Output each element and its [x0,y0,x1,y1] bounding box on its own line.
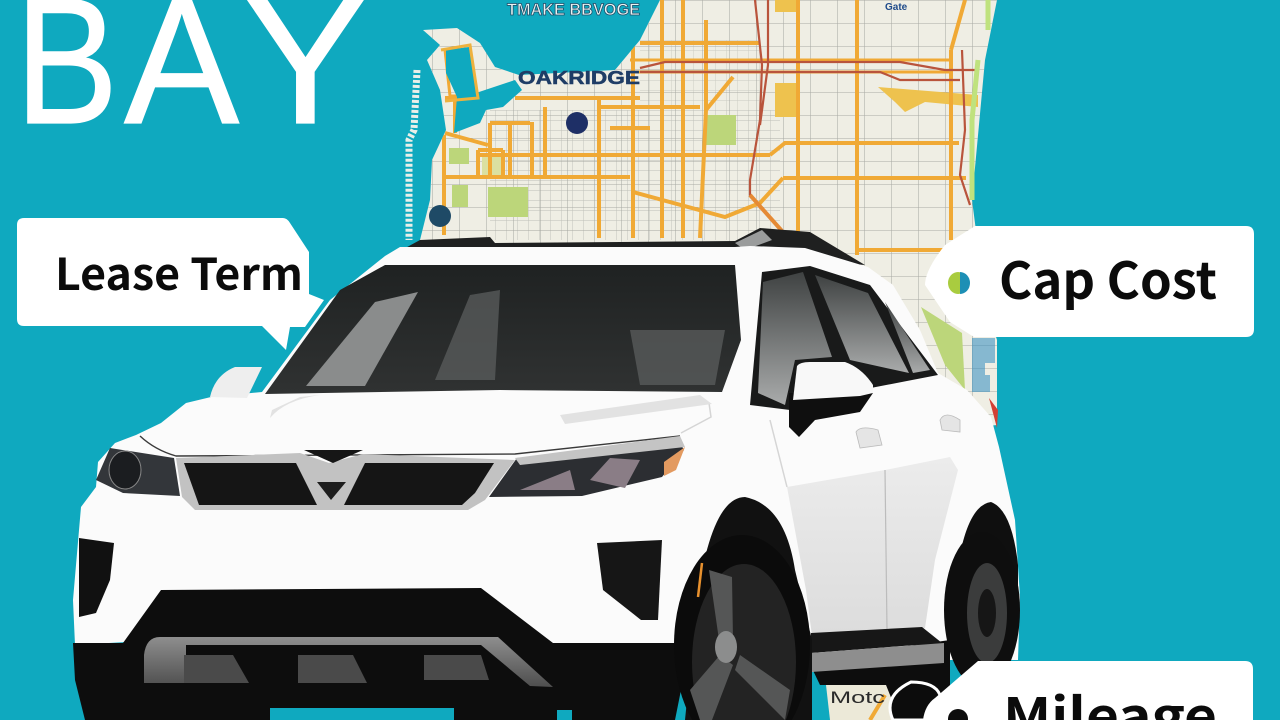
orange road sliver [698,563,702,597]
label text: Lease Term: Lease Term [55,239,303,303]
side skirt [811,643,944,672]
windshield reflection [306,292,418,386]
rear wheel arch [958,502,1018,620]
mirror housing [789,393,873,437]
front arch [685,497,812,720]
under-body shadow [808,640,950,720]
rear quarter window [885,302,930,373]
front door edge [681,403,787,487]
map parks [449,115,965,390]
headlight accent [664,447,685,476]
map top label: TMAKE BBVOGE [507,0,640,19]
left headlight lens [109,451,141,489]
skid plate tabs [184,655,489,683]
hood crease [270,395,712,424]
mirror [793,362,873,400]
map land [420,0,997,430]
map marker [429,205,451,227]
left fog vent [79,538,114,617]
right grille [344,463,494,505]
callout dot [948,272,970,294]
title: BAY [15,0,368,162]
windshield [265,265,741,394]
map street grid [420,0,1000,430]
side skirt dark [811,627,942,653]
left headlight [96,448,180,496]
SUV car [73,228,1020,720]
car body [73,246,1020,672]
map mid label: OAKRIDGE [518,68,640,88]
callout: Lease Term [17,218,324,350]
front wheel [674,535,810,720]
front side window [758,272,832,405]
grille frame [176,453,515,510]
top grille notch [304,450,363,463]
center grille [317,482,346,500]
rear wheel [944,532,1020,688]
rack silver [735,230,772,250]
skid plate [144,637,553,687]
window frame [750,266,938,410]
left mirror [210,367,262,398]
map lake road [441,45,478,101]
map road [870,695,885,720]
right fog vent [597,540,662,620]
right headlight inner [520,458,640,490]
map fragment below car [826,685,900,720]
map red highway [640,0,975,206]
label text: Cap Cost: Cap Cost [999,240,1217,314]
map marker [566,112,588,134]
roof rack [398,228,865,265]
map lake [446,47,522,133]
door handles [856,415,960,448]
rear side window [815,275,909,373]
hood edge [140,436,680,456]
map pin [890,682,940,720]
map coast strip [409,70,417,240]
map major roads [444,0,966,255]
map text: Motc [830,688,886,707]
lower bumper [73,588,687,720]
left grille [184,463,317,505]
map east coast strip [972,0,988,200]
callout: Cap Cost [925,226,1254,337]
right headlight chrome [515,436,685,465]
map top-right marker: Gate [885,2,908,13]
door shading [787,457,958,636]
city map [409,0,1000,430]
right headlight [489,441,684,497]
map yellow zones [775,0,978,117]
callout: Mileage [923,661,1253,720]
map east blue labels [972,338,995,392]
map red spot [989,398,998,428]
door seam [885,470,887,630]
callout dot [948,709,968,720]
windshield interior [435,290,725,385]
